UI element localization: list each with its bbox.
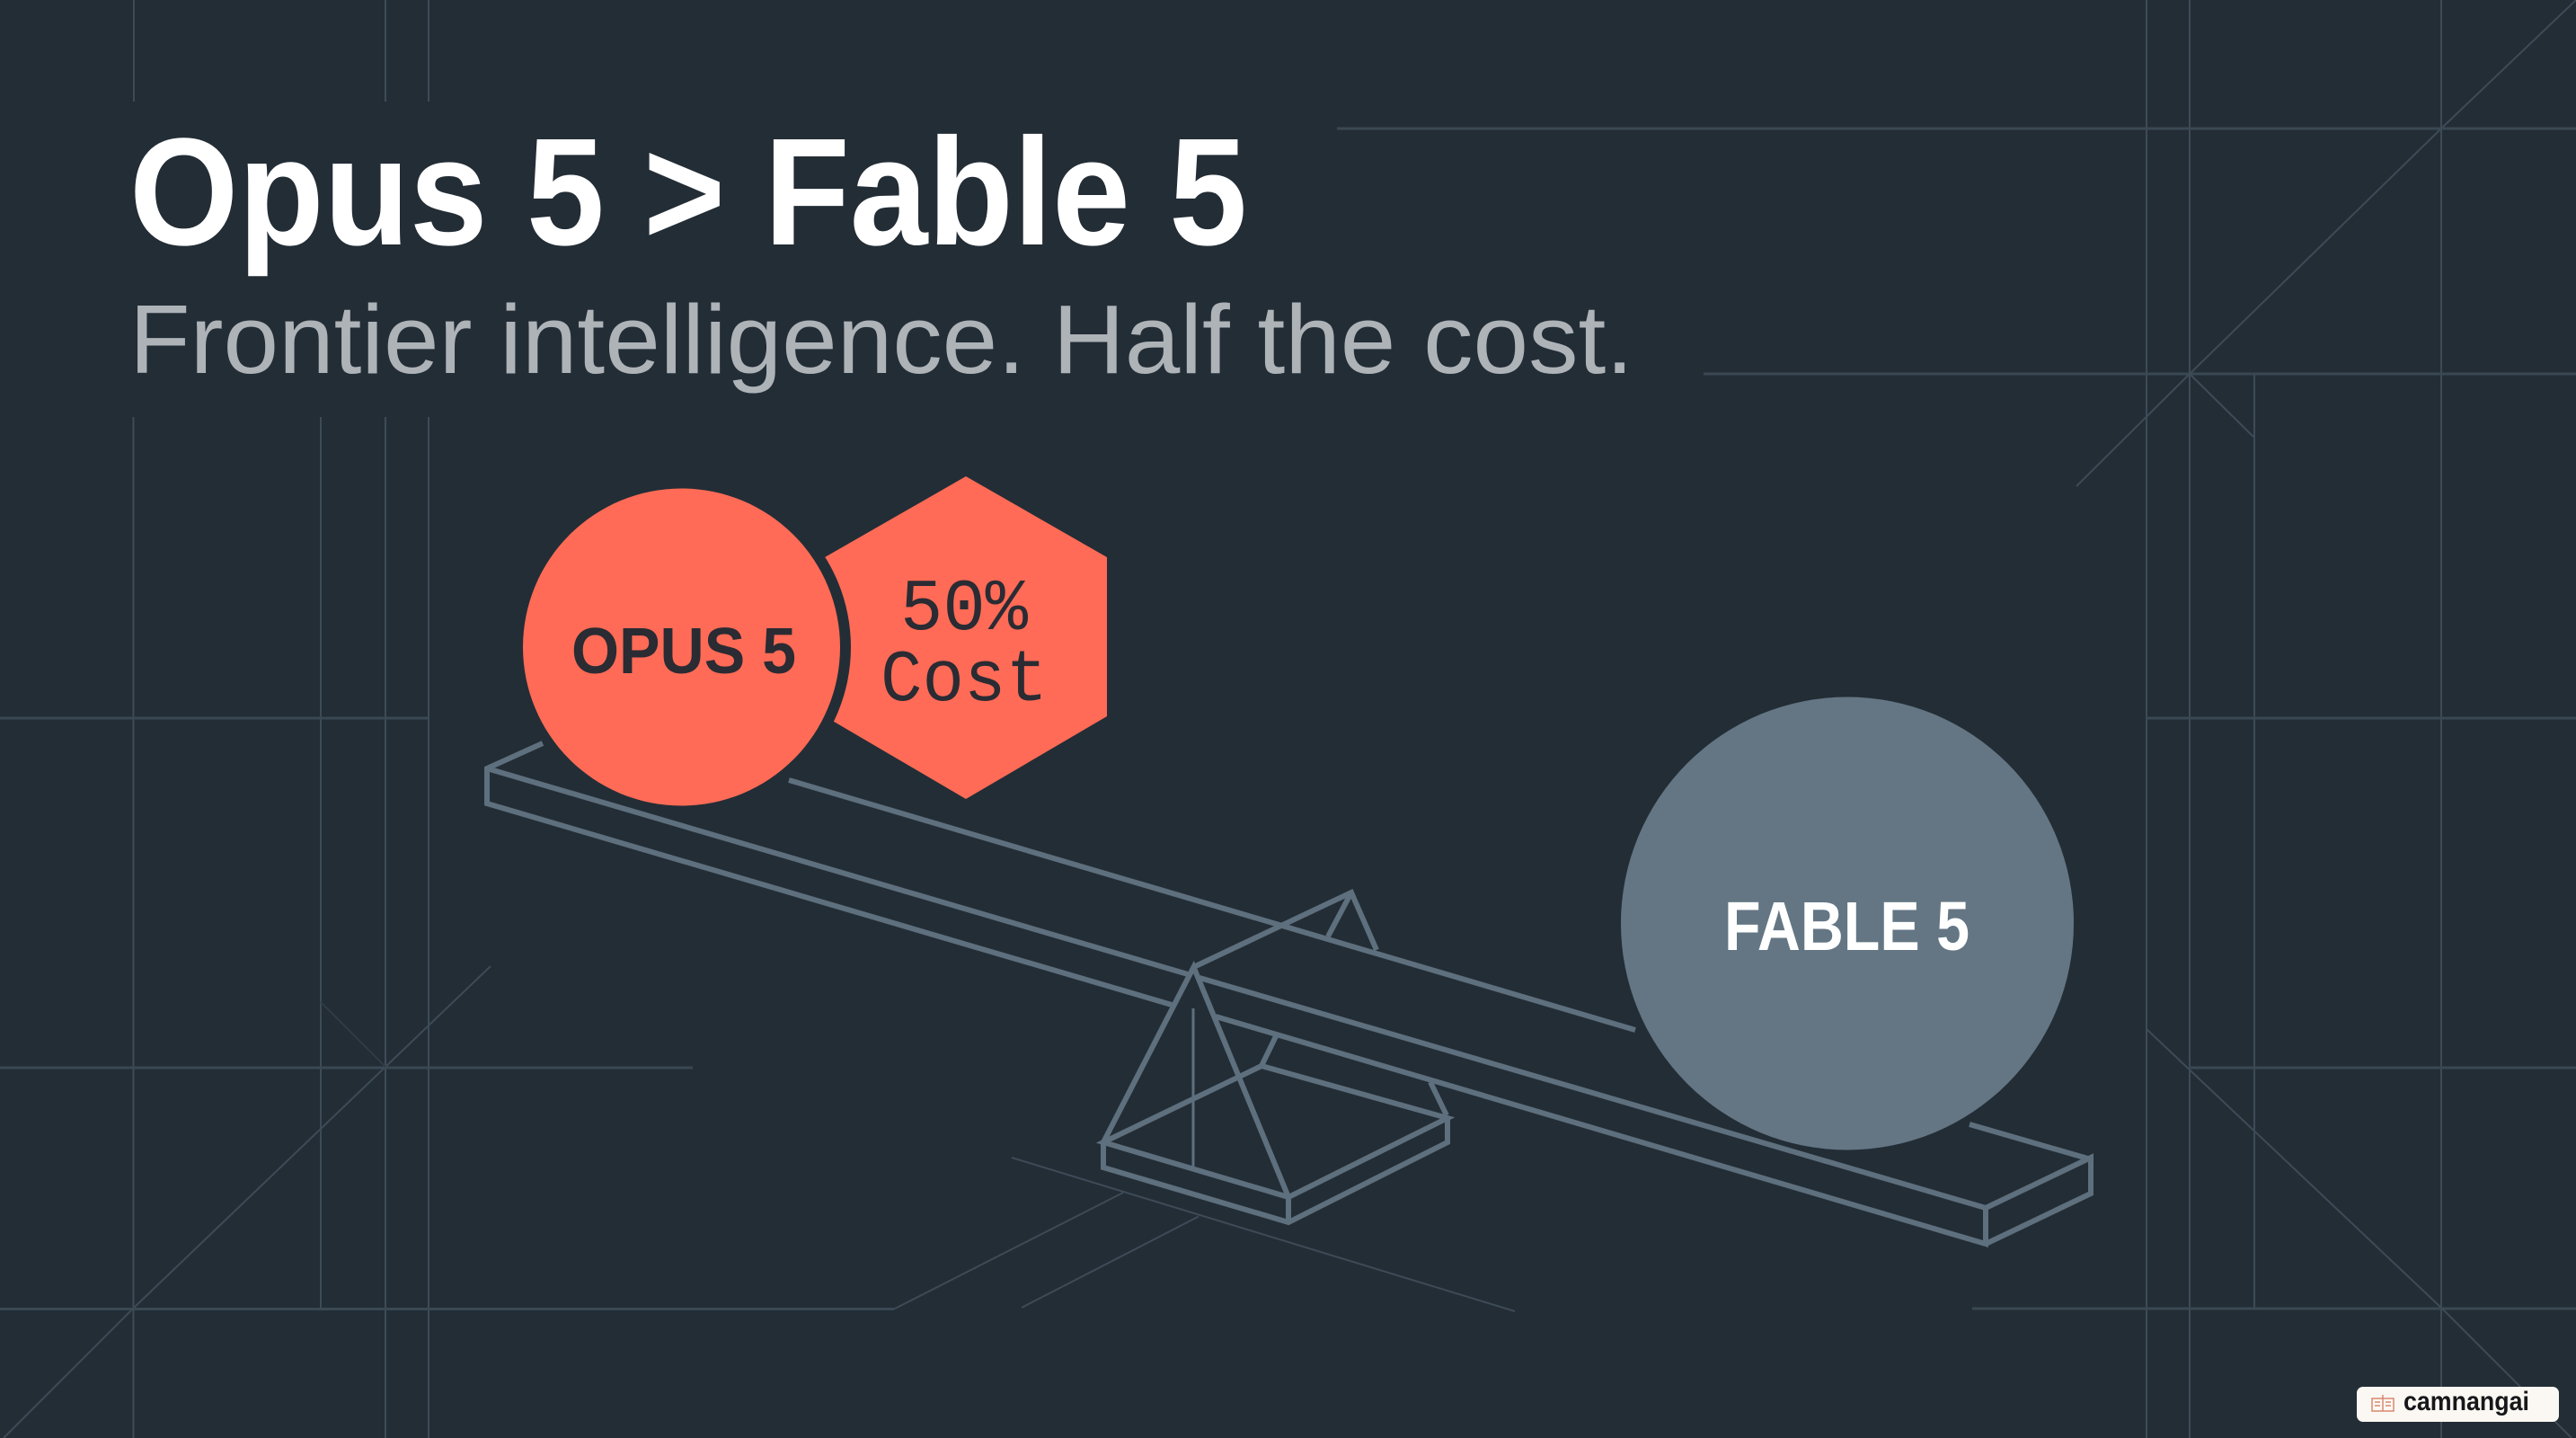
title: Opus 5 > Fable 5 — [129, 107, 1247, 278]
seesaw pivot — [1103, 892, 1447, 1222]
circle: Opus 5: OPUS 5 — [571, 616, 796, 688]
circle: Opus 5 — [523, 489, 840, 805]
watermark badge — [2357, 1387, 2559, 1422]
watermark badge: camnangai — [2403, 1387, 2529, 1416]
seesaw beam — [487, 743, 2091, 1244]
icon: open book — [2372, 1395, 2394, 1411]
circle: Fable 5: FABLE 5 — [1724, 888, 1970, 965]
subtitle: Frontier intelligence. Half the cost. — [129, 285, 1633, 395]
hexagon badge: 50% cost — [511, 476, 1107, 817]
circle: Fable 5 — [1621, 697, 2074, 1150]
hexagon badge: 50% cost: Cost — [881, 639, 1048, 723]
hexagon badge: 50% cost: 50% — [900, 568, 1029, 652]
